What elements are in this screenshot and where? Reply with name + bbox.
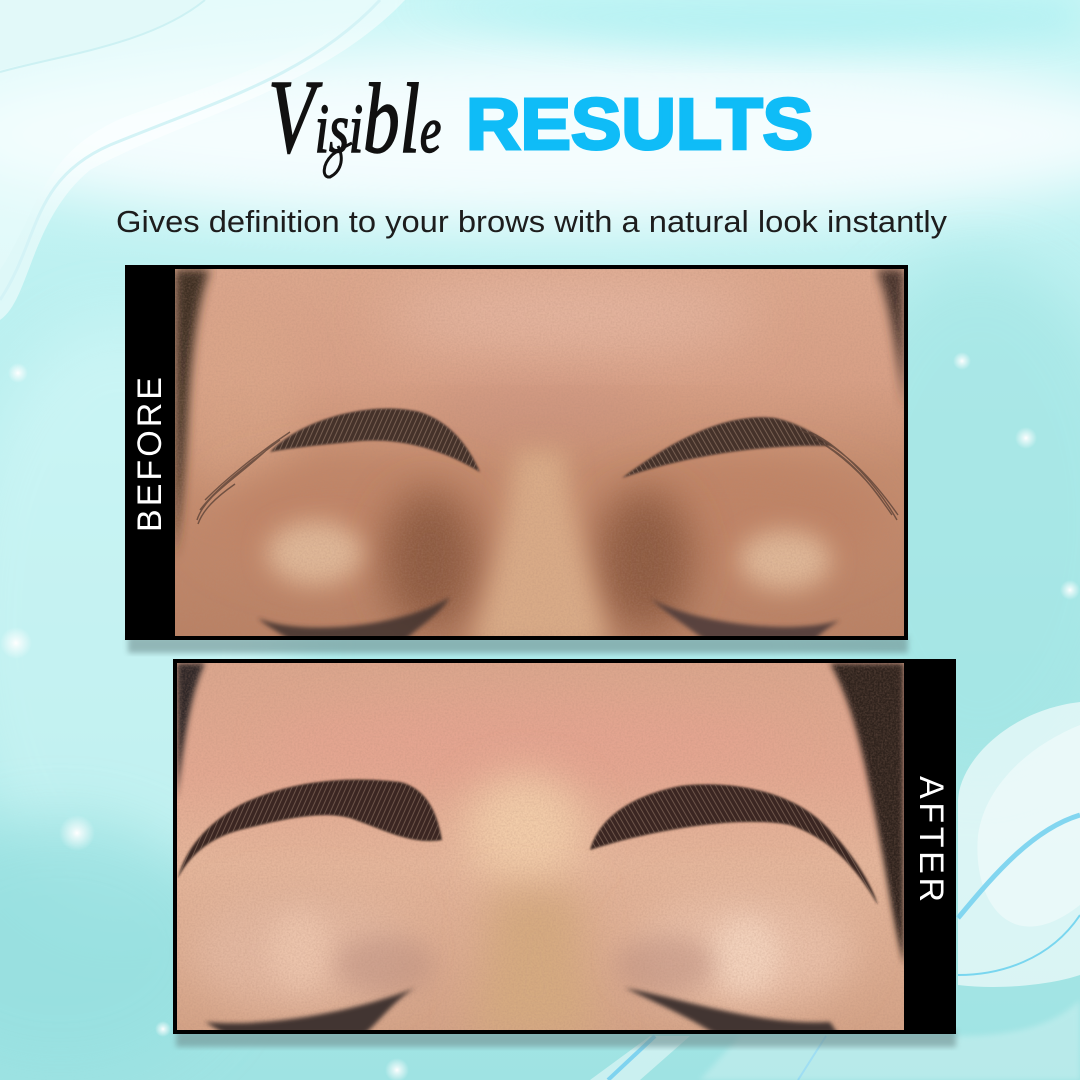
before left lash line — [258, 597, 450, 640]
after face photo — [177, 663, 904, 1040]
panel: before photo — [125, 265, 908, 650]
before left eyebrow — [197, 408, 480, 524]
title script word: Visible — [268, 58, 441, 175]
after right eyebrow — [590, 784, 878, 905]
shadow: after panel — [176, 1030, 956, 1047]
shadow: before panel — [128, 636, 908, 653]
decorative waves: top left — [0, 0, 405, 320]
after right lash line — [625, 988, 838, 1034]
panel: after photo — [173, 659, 956, 1040]
before right lash line — [652, 599, 840, 636]
before label: BEFORE — [131, 377, 169, 532]
after left eyebrow — [178, 780, 442, 878]
subtitle: Gives definition to your brows with a natural look instantly — [116, 204, 948, 239]
title bold word: RESULTS — [466, 85, 813, 165]
after left lash line — [205, 988, 415, 1034]
decorative waves: bottom right — [590, 702, 1080, 1080]
after label: AFTER — [912, 776, 950, 902]
before right eyebrow — [622, 417, 898, 520]
sparkles — [0, 352, 1080, 1080]
before face photo — [175, 269, 904, 650]
